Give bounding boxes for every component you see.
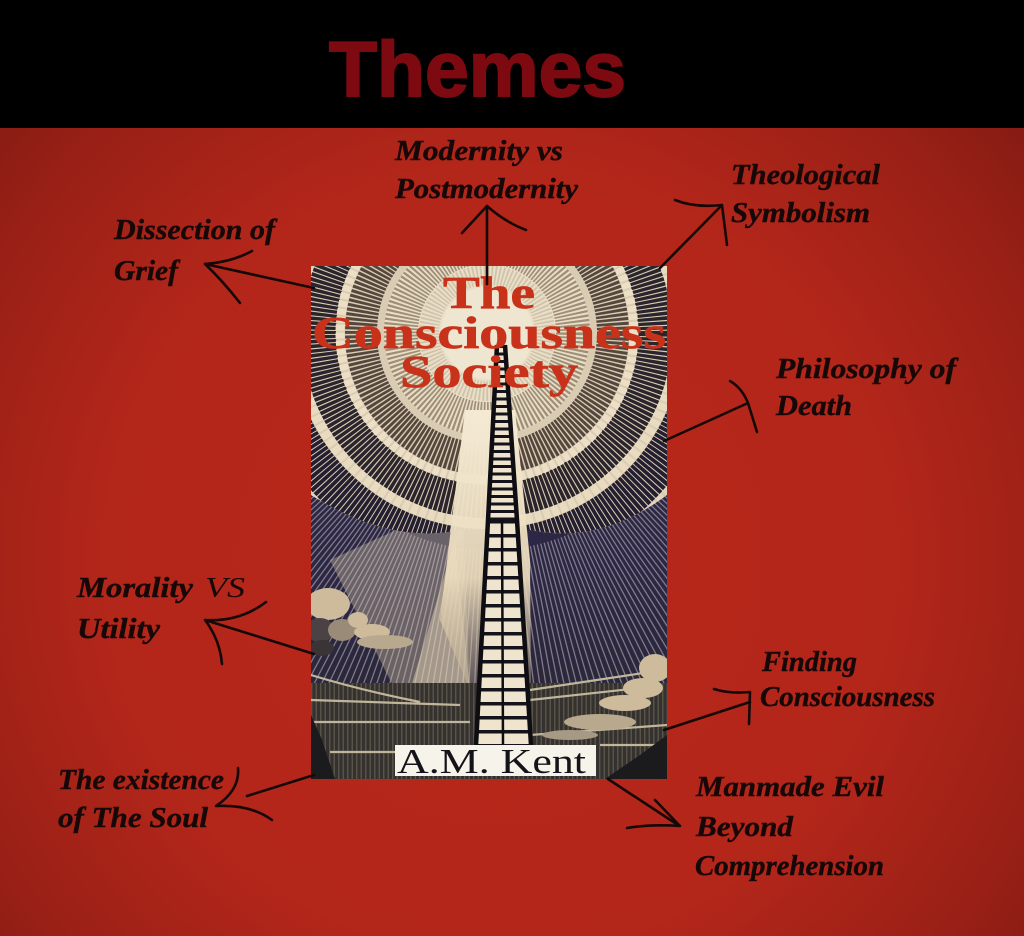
theme: Finding Consciousness (760, 647, 935, 713)
theme: Morality VS Utility: VS (205, 573, 245, 604)
author plate (395, 745, 596, 776)
arrow: to Modernity vs Postmodernity (462, 206, 526, 284)
theme: Modernity vs Postmodernity: Modernity vs (394, 136, 563, 167)
theme: Manmade Evil Beyond Comprehension: Comprehension (695, 851, 884, 882)
theme: Modernity vs Postmodernity: Postmodernity (394, 174, 579, 205)
cover title (312, 267, 666, 397)
theme: Manmade Evil Beyond Comprehension: Manmade Evil (695, 772, 884, 803)
arrow: to Dissection of Grief (205, 251, 314, 303)
theme: Finding Consciousness: Finding (761, 647, 857, 678)
theme: The existence of The Soul (58, 765, 224, 834)
arrow: to Finding Consciousness (664, 689, 750, 730)
cover sky base (311, 495, 667, 683)
book cover (311, 266, 667, 779)
ladder (476, 345, 531, 745)
theme: Dissection of Grief (113, 215, 278, 287)
theme: Manmade Evil Beyond Comprehension: Beyond (695, 812, 794, 843)
central light beam (440, 410, 531, 690)
theme: Morality VS Utility: Morality (76, 573, 194, 604)
arrow: to The existence of The Soul (216, 768, 314, 820)
arrow: to Philosophy of Death (664, 381, 757, 441)
theme: The existence of The Soul: of The Soul (58, 803, 208, 834)
theme: Theological Symbolism: Theological (731, 160, 880, 191)
black header band (0, 0, 1024, 128)
theme: Modernity vs Postmodernity (394, 136, 579, 205)
theme: Morality VS Utility (76, 573, 245, 645)
horizon bands (311, 672, 667, 779)
theme: The existence of The Soul: The existence (58, 765, 224, 796)
theme: Dissection of Grief: Dissection of (113, 215, 278, 246)
theme: Dissection of Grief: Grief (114, 256, 181, 287)
arrow: to Morality VS Utility (205, 602, 314, 664)
theme: Philosophy of Death (775, 354, 959, 422)
title: Themes: Themes (329, 25, 626, 113)
theme: Theological Symbolism (731, 160, 880, 229)
clouds left (306, 588, 413, 656)
theme: Theological Symbolism: Symbolism (731, 198, 870, 229)
theme: Manmade Evil Beyond Comprehension (695, 772, 884, 882)
theme: Philosophy of Death: Philosophy of (775, 354, 959, 385)
cover title: Consciousness (312, 307, 666, 358)
theme: Finding Consciousness: Consciousness (760, 682, 935, 713)
theme: Philosophy of Death: Death (775, 391, 852, 422)
cover title: Society (400, 346, 578, 397)
clouds right (542, 654, 671, 740)
arrow: to Theological Symbolism (660, 200, 727, 268)
lower sky rays (311, 496, 667, 683)
author plate: A.M. Kent (397, 742, 586, 781)
arrow: to Manmade Evil Beyond Comprehension (608, 779, 680, 828)
concentric radiating rings (311, 266, 667, 534)
cover title: The (443, 267, 535, 318)
rocks in lower corners (311, 715, 667, 779)
theme: Morality VS Utility: Utility (77, 614, 161, 645)
